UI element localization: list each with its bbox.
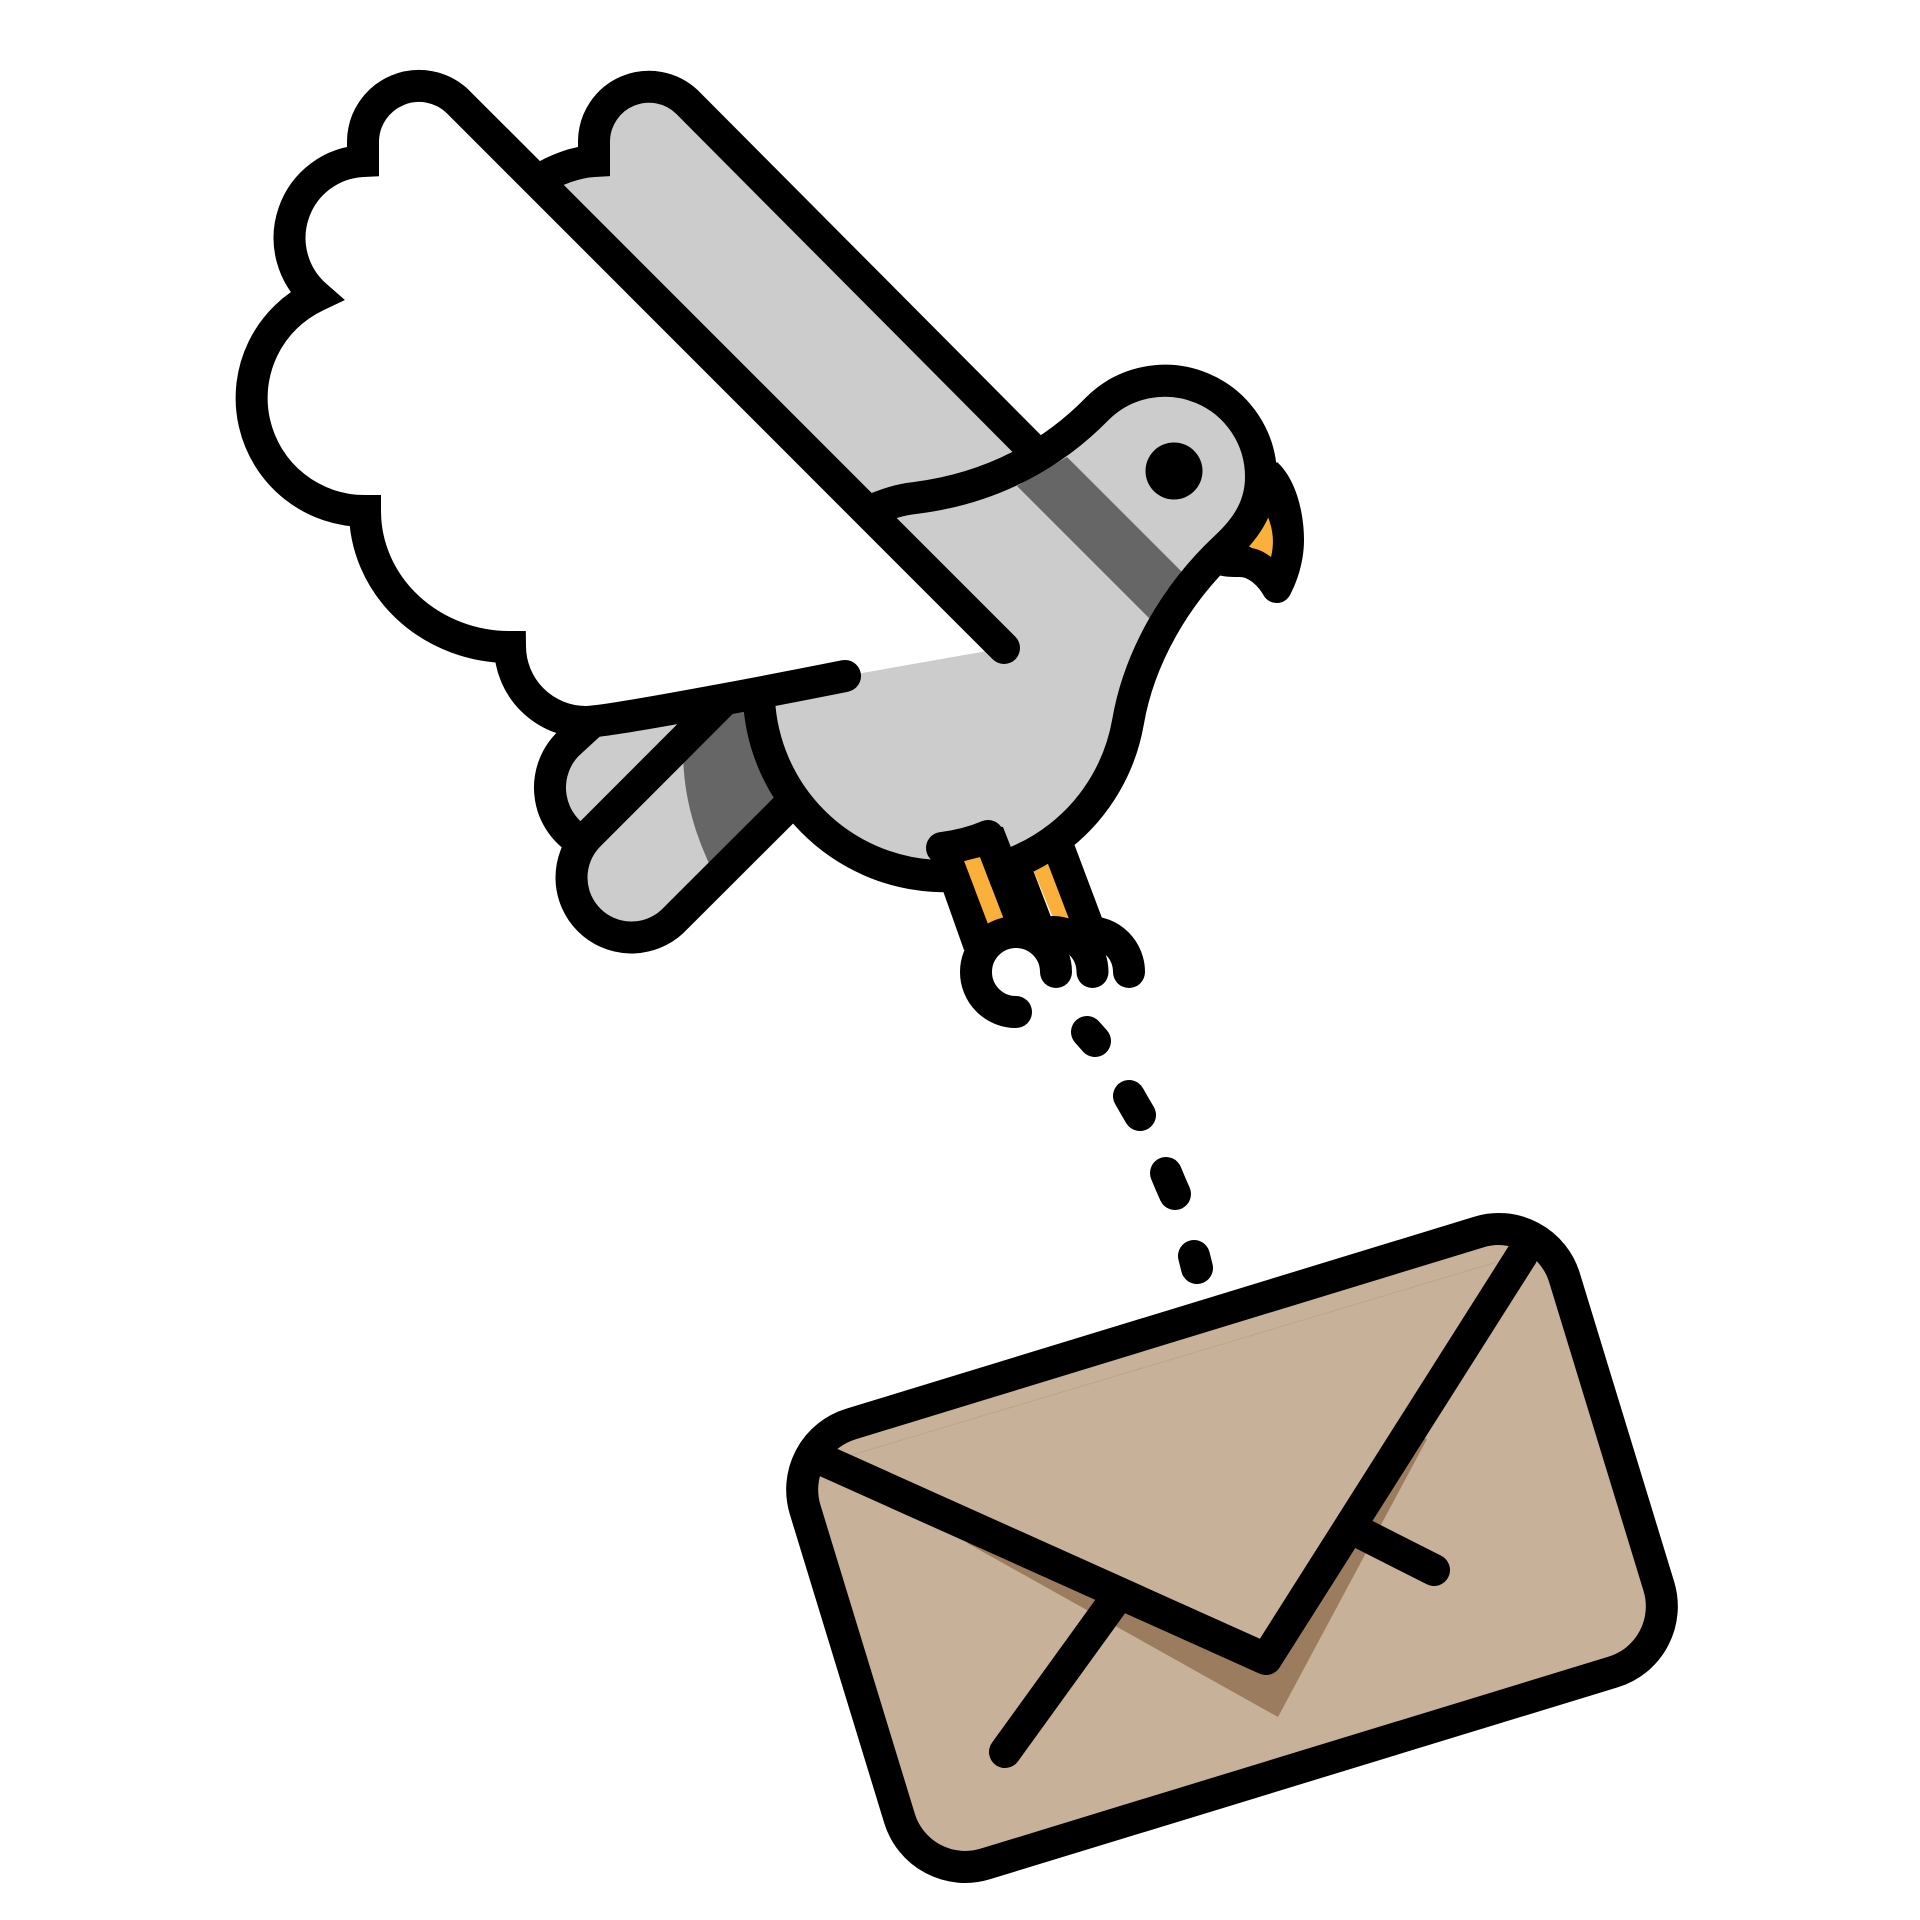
- near leg: [930, 825, 1051, 950]
- envelope lower left fold: [1005, 1604, 1112, 1752]
- body: [759, 381, 1261, 876]
- beak: [1218, 462, 1304, 603]
- neck band: [1017, 457, 1183, 619]
- flap crease: [845, 1262, 1497, 1457]
- flap shadow: [967, 1400, 1427, 1717]
- flap outline: [823, 1255, 1522, 1659]
- envelope body: [785, 1212, 1679, 1884]
- far leg: [1025, 833, 1105, 935]
- pigeon: [252, 86, 1304, 1012]
- tail feather: [571, 697, 810, 938]
- flap fill: [823, 1255, 1522, 1659]
- envelope outline: [785, 1212, 1679, 1884]
- envelope lower right fold: [1357, 1531, 1434, 1570]
- envelope: [785, 1212, 1679, 1884]
- front wing: [252, 86, 1004, 722]
- feet: [976, 925, 1129, 1012]
- small rear tail feather: [550, 705, 720, 843]
- back wing: [539, 87, 1060, 560]
- dotted flight path: [1087, 1032, 1197, 1268]
- eye: [1146, 442, 1202, 500]
